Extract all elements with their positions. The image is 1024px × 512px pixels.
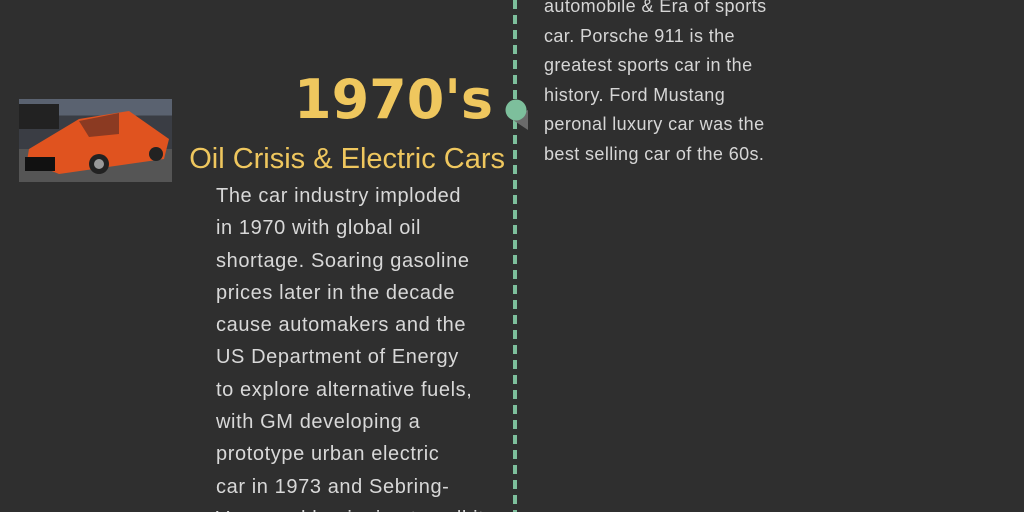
timeline marker <box>506 100 528 130</box>
image: orange electric car <box>19 99 172 182</box>
text block: 1970s description: to explore alternative fuels, <box>216 379 472 401</box>
text block: previous era (right): peronal luxury car was the <box>544 114 765 134</box>
text block: 1970s description: prices later in the decade <box>216 282 455 304</box>
subheading: Oil Crisis & Electric Cars <box>189 143 505 175</box>
text block: previous era (right): best selling car of the 60s. <box>544 144 764 164</box>
text block: 1970s description <box>216 185 484 512</box>
text block: 1970s description: prototype urban electric <box>216 443 439 465</box>
text block: 1970s description: in 1970 with global oil <box>216 217 421 239</box>
text block: 1970s description: The car industry imploded <box>216 185 461 207</box>
text block: 1970s description: cause automakers and the <box>216 314 466 336</box>
text block: previous era (right): greatest sports car in the <box>544 55 752 75</box>
heading: 1970's: 1970's <box>294 68 493 131</box>
text block: previous era (right): history. Ford Mustang <box>544 84 725 104</box>
text block: 1970s description: shortage. Soaring gasoline <box>216 250 470 272</box>
text block: 1970s description: car in 1973 and Sebring- <box>216 476 449 498</box>
text block: 1970s description: US Department of Energy <box>216 346 459 368</box>
timeline dashed line <box>513 0 517 512</box>
text block: previous era (right) <box>544 0 767 164</box>
text block: 1970s description: with GM developing a <box>216 411 420 433</box>
text block: previous era (right): car. Porsche 911 is the <box>544 26 735 46</box>
